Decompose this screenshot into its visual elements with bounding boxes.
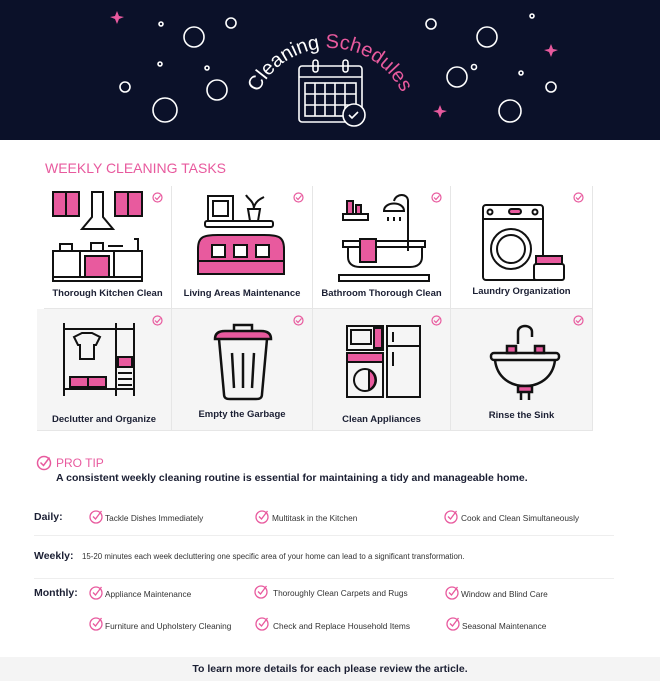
pro tip: A consistent weekly cleaning routine is essential for maintaining a tidy and manageable home.: [56, 472, 528, 484]
schedule list: Window and Blind Care: [461, 589, 548, 599]
schedule list: 15-20 minutes each week decluttering one specific area of your home can lead to a significant transformation.: [82, 552, 464, 561]
schedule list: Multitask in the Kitchen: [272, 513, 357, 523]
schedule list: Daily:: [34, 511, 63, 523]
task: bathroom: Bathroom Thorough Clean: [321, 288, 442, 299]
task: sink: Rinse the Sink: [489, 410, 554, 421]
schedule list: Monthly:: [34, 587, 78, 599]
schedule list: Thoroughly Clean Carpets and Rugs: [273, 588, 408, 598]
header banner: [0, 0, 660, 140]
pro tip: [36, 456, 528, 484]
footer: To learn more details for each please review the article.: [192, 663, 468, 675]
task: declutter: [37, 309, 172, 431]
schedule list: Tackle Dishes Immediately: [105, 513, 203, 523]
task: laundry: [451, 186, 593, 309]
task: living: [172, 186, 313, 309]
section heading: WEEKLY CLEANING TASKS: [45, 160, 226, 176]
task: kitchen: Thorough Kitchen Clean: [52, 288, 163, 299]
pro tip: PRO TIP: [56, 456, 104, 470]
task: garbage: Empty the Garbage: [198, 409, 286, 420]
schedule list: Cook and Clean Simultaneously: [461, 513, 579, 523]
task: kitchen: [44, 186, 172, 309]
icon: calendar: [299, 60, 365, 126]
task: sink: [451, 309, 593, 431]
task: declutter: Declutter and Organize: [52, 414, 156, 425]
task: appliances: Clean Appliances: [342, 414, 421, 425]
task: living: Living Areas Maintenance: [184, 288, 300, 299]
footer: [0, 657, 660, 681]
schedule list: [34, 510, 614, 631]
task: garbage: [172, 309, 313, 431]
schedule list: Seasonal Maintenance: [462, 621, 546, 631]
bubbles and sparkles: [120, 14, 556, 122]
task: laundry: Laundry Organization: [472, 286, 571, 297]
schedule list: Furniture and Upholstery Cleaning: [105, 621, 231, 631]
schedule list: Check and Replace Household Items: [273, 621, 410, 631]
task grid: [37, 186, 593, 431]
task: bathroom: [313, 186, 451, 309]
task: appliances: [313, 309, 451, 431]
schedule list: Appliance Maintenance: [105, 589, 191, 599]
title: Cleaning Schedules: [248, 34, 410, 91]
schedule list: Weekly:: [34, 550, 74, 562]
